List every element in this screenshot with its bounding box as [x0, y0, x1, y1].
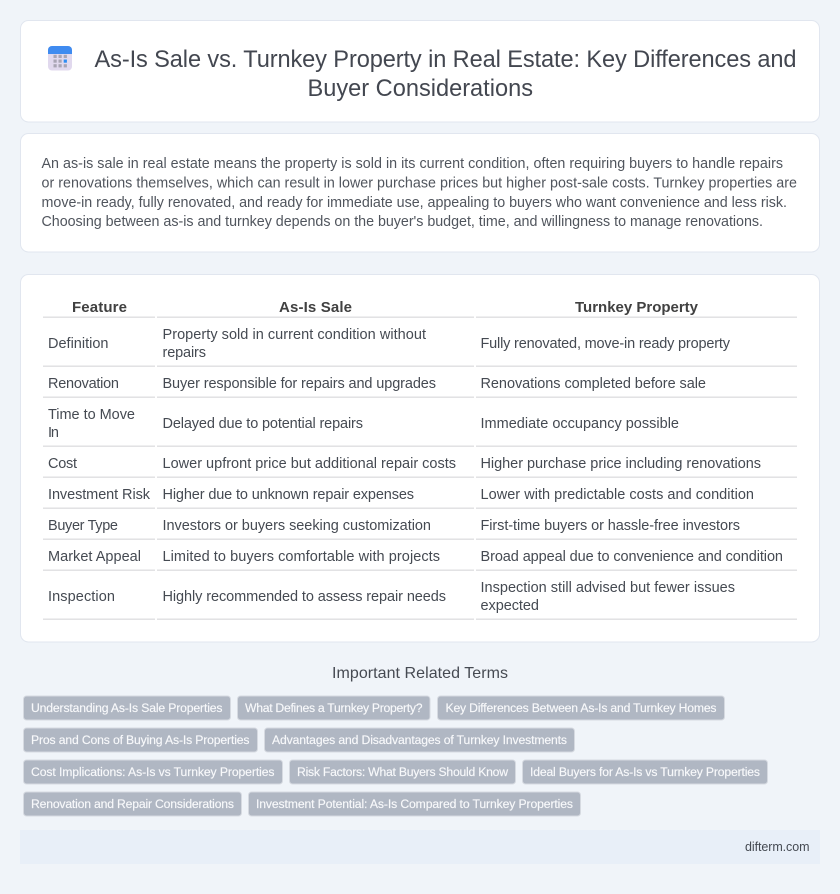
row: time to move in: In	[48, 425, 59, 441]
row: buyer type: Investors or buyers seeking customization	[162, 518, 431, 534]
row: buyer type: First-time buyers or hassle-free investors	[480, 518, 740, 534]
chip: defines turnkey: What Defines a Turnkey Property?	[245, 701, 423, 715]
row: cost	[48, 456, 761, 472]
row: inspection: Inspection still advised but fewer issues	[480, 580, 735, 596]
text block: introduction: Choosing between as-is and turnkey depends on the buyer's budget, time, and willingness to manage renovations.	[42, 214, 763, 230]
chip: pros and cons: Pros and Cons of Buying As-Is Properties	[31, 733, 250, 747]
row: time to move in: Immediate occupancy possible	[480, 416, 679, 432]
row: definition: Property sold in current condition without	[162, 327, 426, 343]
panel: related term chips	[24, 696, 768, 816]
row: definition	[48, 327, 731, 361]
row: investment risk	[48, 487, 754, 503]
chip: renovation and repair	[24, 792, 242, 816]
chip: understanding as-is	[24, 696, 230, 720]
title: Buyer Considerations	[308, 76, 533, 102]
table header row: Turnkey Property	[575, 299, 699, 316]
row: definition: Definition	[48, 336, 108, 352]
row: inspection	[48, 580, 735, 614]
row: market appeal: Market Appeal	[48, 549, 141, 565]
chip: cost implications: Cost Implications: As-Is vs Turnkey Properties	[31, 765, 274, 779]
text block: introduction: An as-is sale in real estate means the property is sold in its current condition, often requiring buyers to handle repairs	[42, 156, 783, 172]
row: definition: repairs	[162, 345, 206, 361]
chip: ideal buyers	[522, 760, 768, 784]
row: definition: Fully renovated, move-in ready property	[480, 336, 731, 352]
table header row: As-Is Sale	[279, 299, 352, 316]
title	[94, 47, 796, 102]
chip: risk factors: Risk Factors: What Buyers Should Know	[297, 765, 508, 779]
row: time to move in: Time to Move	[48, 407, 135, 423]
row: investment risk: Higher due to unknown repair expenses	[162, 487, 414, 503]
row: time to move in: Delayed due to potential repairs	[162, 416, 363, 432]
row: market appeal: Limited to buyers comfortable with projects	[162, 549, 440, 565]
text block: introduction: move-in ready, fully renovated, and ready for immediate use, appealing to buyers who want convenience and less risk.	[42, 195, 787, 211]
table header row	[72, 299, 699, 316]
row: inspection: Inspection	[48, 589, 115, 605]
text block: introduction: or renovations themselves, which can result in lower purchase prices but higher post-sale costs. Turnkey properties are	[42, 176, 797, 192]
row: renovation: Renovation	[48, 376, 119, 392]
chip: renovation and repair: Renovation and Repair Considerations	[31, 797, 234, 811]
row: renovation: Renovations completed before sale	[480, 376, 706, 392]
row: buyer type	[48, 518, 740, 534]
row: cost: Higher purchase price including renovations	[480, 456, 761, 472]
text block: introduction	[42, 156, 797, 230]
chip: advantages: Advantages and Disadvantages of Turnkey Investments	[272, 733, 567, 747]
row: investment risk: Investment Risk	[48, 487, 151, 503]
row: time to move in	[48, 407, 679, 441]
chip: cost implications	[24, 760, 282, 784]
heading: important related terms: Important Related Terms	[332, 665, 508, 682]
row: buyer type: Buyer Type	[48, 518, 118, 534]
footer: site name: difterm.com	[745, 840, 810, 854]
panel: comparison table	[20, 274, 820, 642]
icon: calendar	[48, 46, 72, 70]
row: market appeal	[48, 549, 783, 565]
chip: risk factors	[290, 760, 516, 784]
chip: defines turnkey	[238, 696, 430, 720]
row: renovation	[48, 376, 706, 392]
title: As-Is Sale vs. Turnkey Property in Real Estate: Key Differences and	[94, 47, 796, 73]
row: investment risk: Lower with predictable costs and condition	[480, 487, 754, 503]
panel: title card	[20, 20, 820, 122]
row: cost: Lower upfront price but additional repair costs	[162, 456, 456, 472]
panel: introduction text	[20, 134, 820, 252]
chip: ideal buyers: Ideal Buyers for As-Is vs Turnkey Properties	[530, 765, 760, 779]
chip: key differences: Key Differences Between As-Is and Turnkey Homes	[446, 701, 716, 715]
table header row: Feature	[72, 299, 127, 316]
row: renovation: Buyer responsible for repairs and upgrades	[162, 376, 436, 392]
chip: understanding as-is: Understanding As-Is Sale Properties	[31, 701, 222, 715]
row: inspection: Highly recommended to assess repair needs	[162, 589, 446, 605]
row: market appeal: Broad appeal due to convenience and condition	[480, 549, 783, 565]
chip: investment potential: Investment Potential: As-Is Compared to Turnkey Properties	[256, 797, 573, 811]
footer bar	[20, 830, 820, 864]
chip: key differences	[438, 696, 724, 720]
chip: investment potential	[248, 792, 580, 816]
row: cost: Cost	[48, 456, 77, 472]
row: inspection: expected	[480, 598, 539, 614]
chip: pros and cons	[24, 728, 258, 752]
chip: advantages	[264, 728, 574, 752]
